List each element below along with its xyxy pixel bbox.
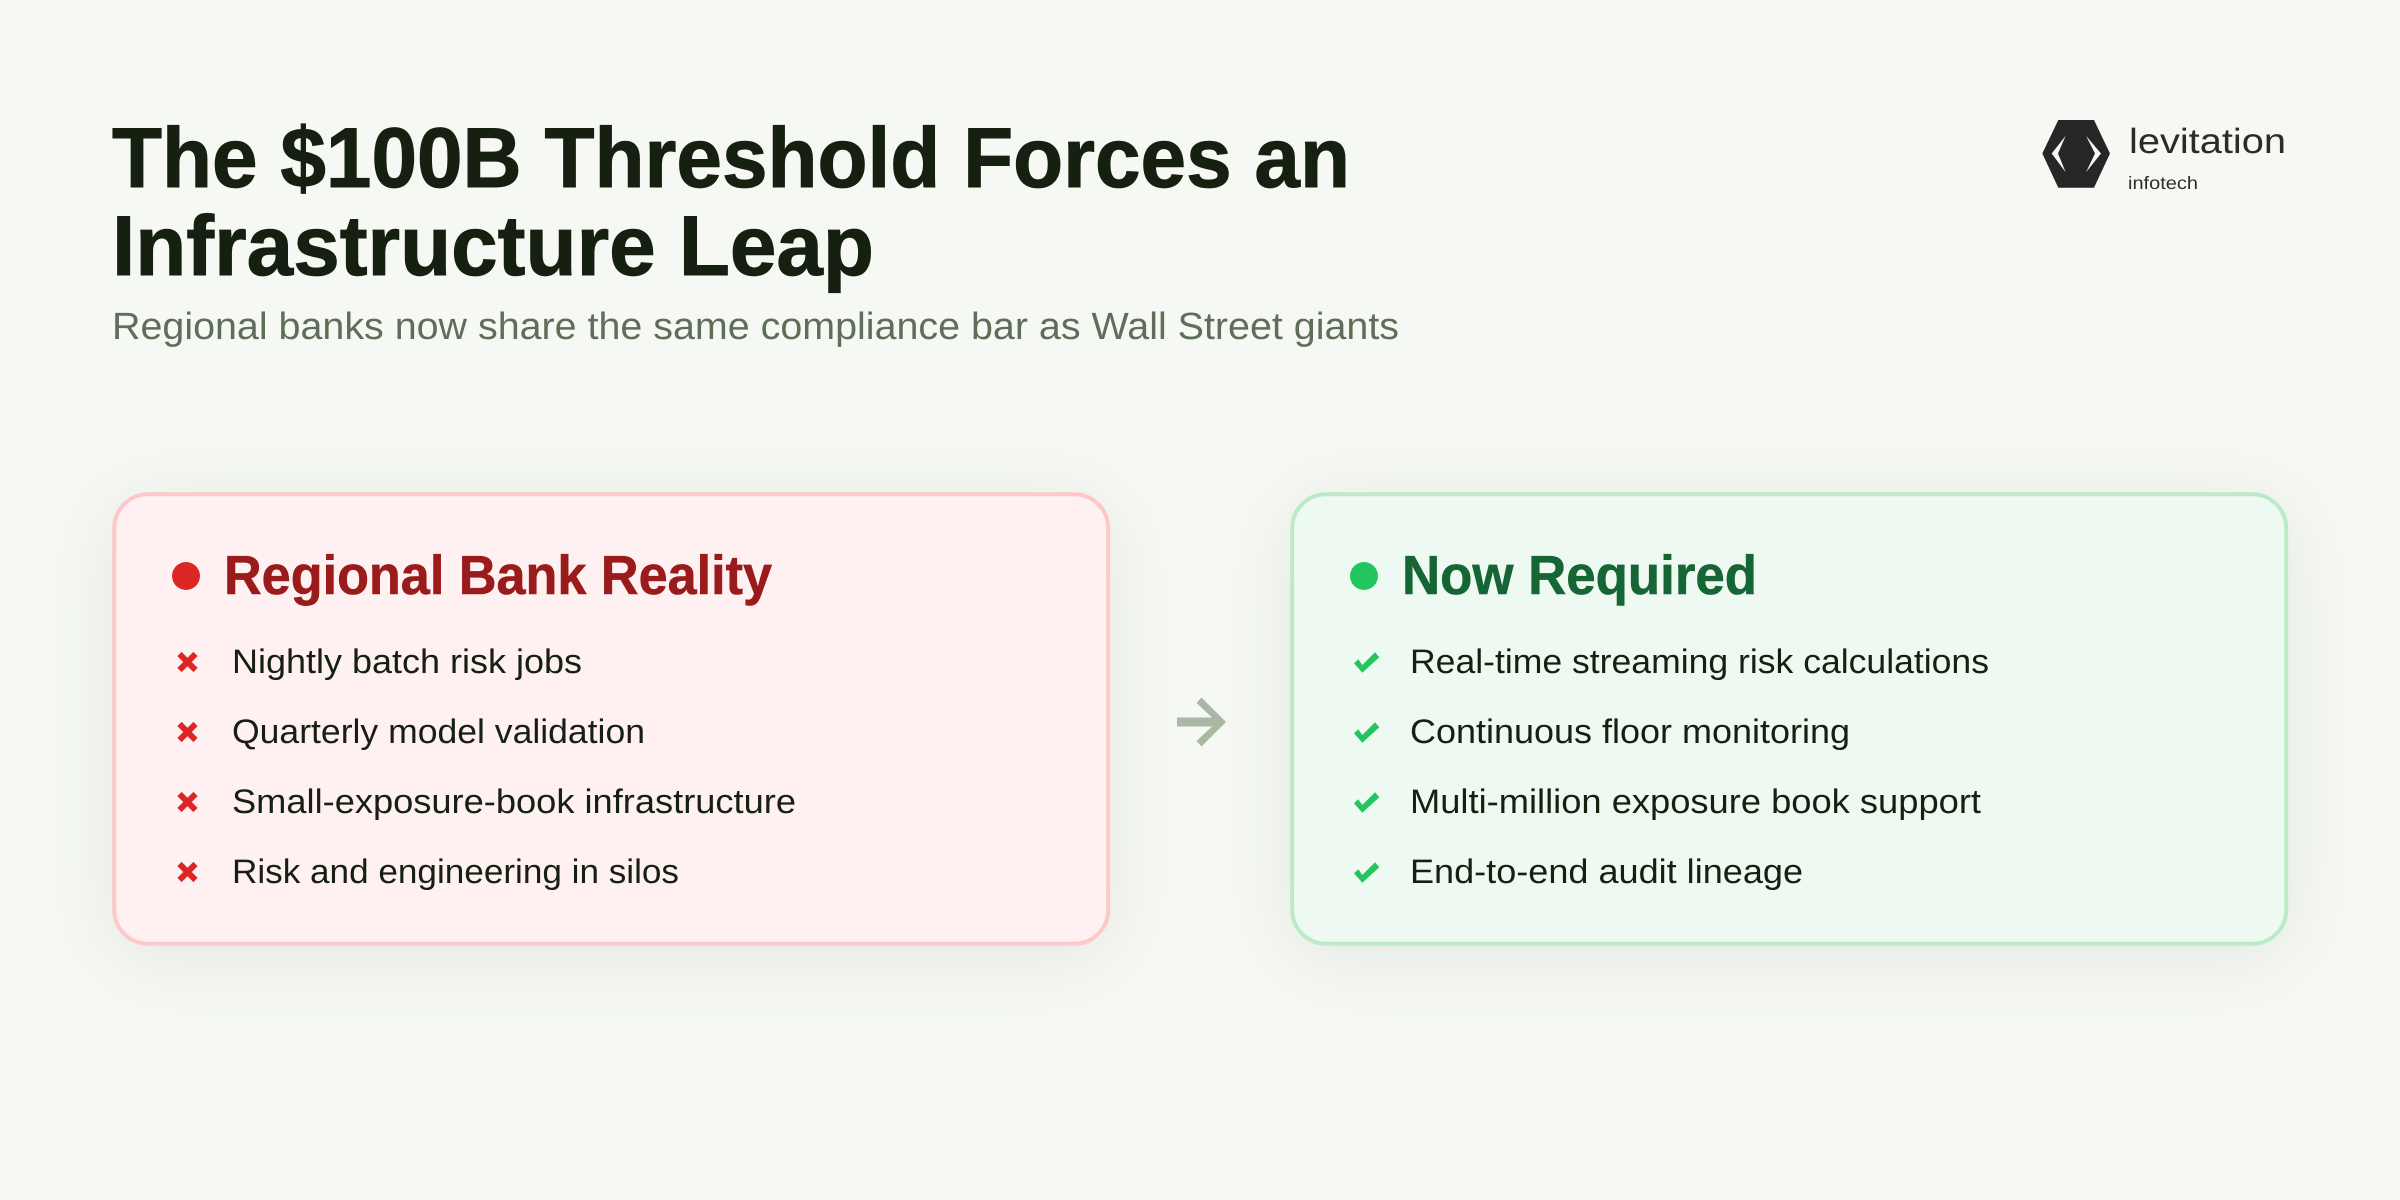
status dot: green	[1350, 562, 1378, 590]
list: current state	[180, 643, 796, 891]
status dot: red	[172, 562, 200, 590]
list item: small exposure book: Small-exposure-book infrastructure	[232, 783, 796, 821]
list item: real-time streaming: Real-time streaming risk calculations	[1410, 643, 1989, 681]
icon: hexagon with chevrons	[2042, 120, 2110, 188]
panel background	[1292, 494, 2286, 944]
title: The $100B Threshold Forces an	[112, 111, 1350, 206]
logo: levitation infotech	[2042, 120, 2286, 193]
arrow: transition to required state	[1177, 698, 1226, 746]
list item: nightly batch: Nightly batch risk jobs	[232, 643, 582, 681]
list item: floor monitoring: Continuous floor monitoring	[1410, 713, 1850, 751]
logo sub-wordmark: infotech	[2128, 173, 2198, 193]
panel heading: Now Required	[1402, 544, 1757, 606]
panel background	[114, 494, 1108, 944]
panel: regional bank reality	[114, 494, 1108, 944]
list item: silos: Risk and engineering in silos	[232, 853, 679, 891]
panel: now required	[1292, 494, 2286, 944]
subtitle: Regional banks now share the same compliance bar as Wall Street giants	[112, 306, 1399, 348]
logo wordmark: levitation	[2129, 122, 2286, 161]
title	[112, 111, 1350, 294]
list item: audit lineage: End-to-end audit lineage	[1410, 853, 1803, 891]
panel heading: Regional Bank Reality	[224, 544, 772, 606]
list item: exposure book support: Multi-million exposure book support	[1410, 783, 1982, 821]
list item: quarterly validation: Quarterly model validation	[232, 713, 645, 751]
list: required state	[1354, 643, 1989, 891]
title: Infrastructure Leap	[112, 199, 874, 294]
